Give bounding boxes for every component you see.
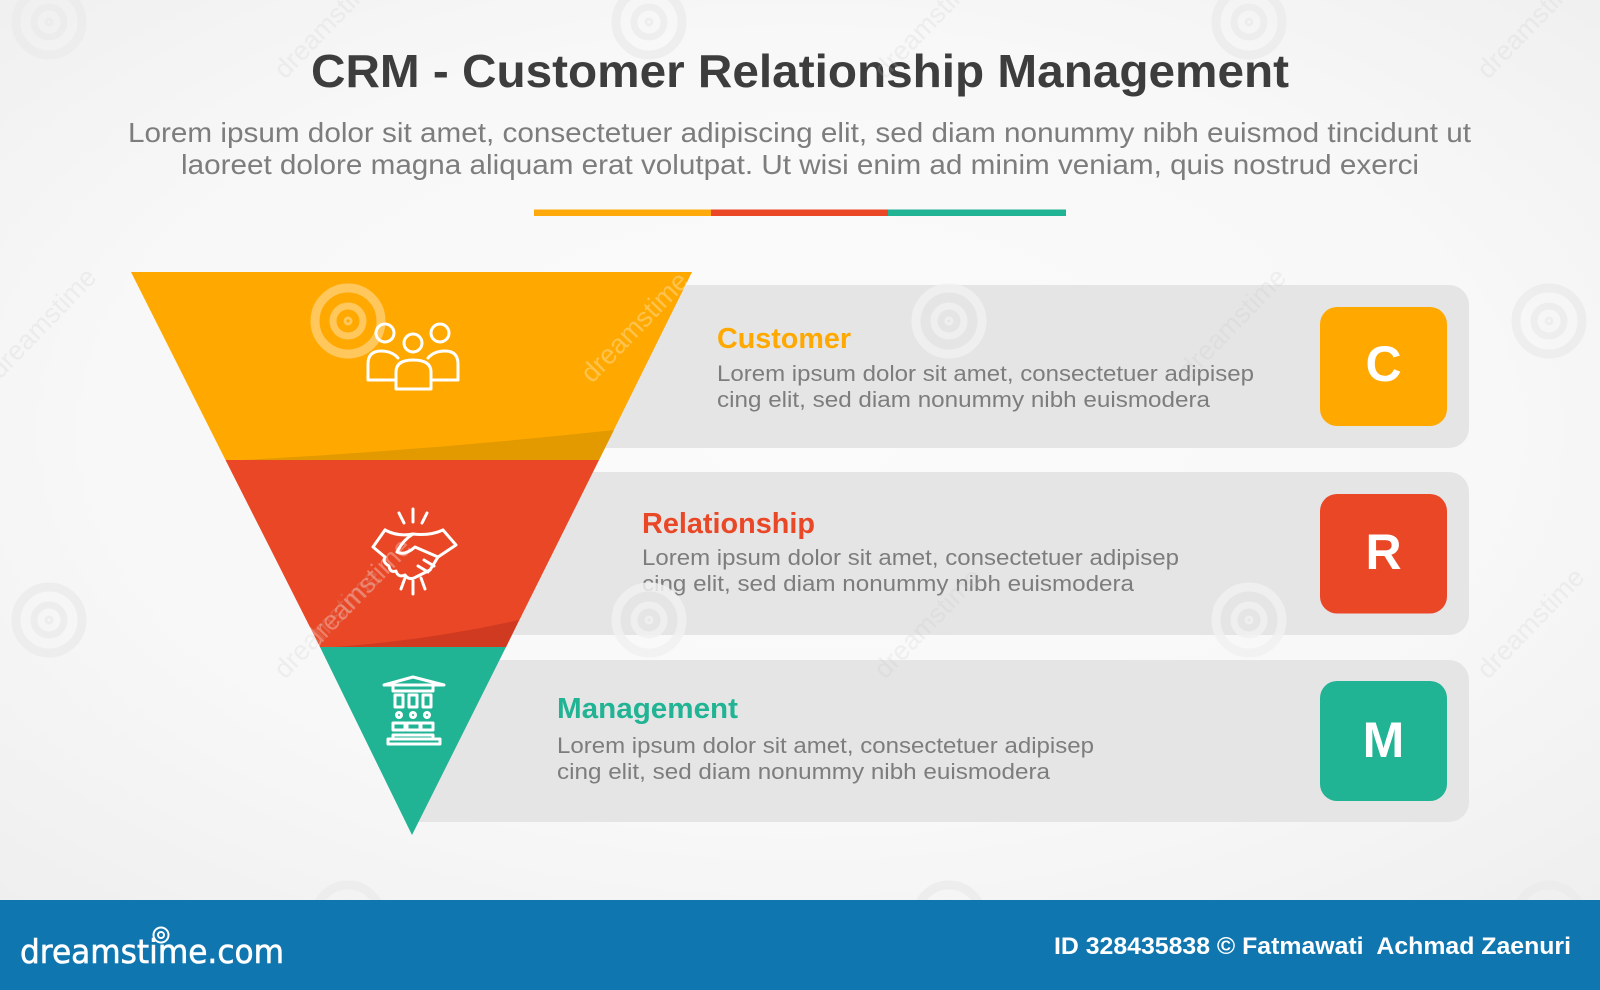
watermark text: dreamstime (575, 266, 694, 388)
letter tile M (1320, 681, 1447, 801)
letter tile C (1320, 307, 1447, 426)
text block: customer (717, 361, 1254, 412)
subtitle text (128, 117, 1471, 180)
text block: customer: Lorem ipsum dolor sit amet, consectetuer adipisep (717, 361, 1254, 386)
watermark text: dreamstime (868, 562, 987, 684)
watermark text: dreamstime (1173, 262, 1292, 384)
panel: customer (500, 285, 1469, 448)
pyramid band: management (320, 647, 506, 835)
heading: relationship: Relationship (642, 508, 815, 540)
icon: handshake (373, 509, 456, 594)
text block: relationship: Lorem ipsum dolor sit amet, consectetuer adipisep (642, 545, 1179, 570)
watermark text: dreamstime (298, 532, 417, 654)
watermark spiral on pyramid (315, 288, 381, 354)
footer bar (0, 900, 1600, 990)
heading: management: Management (557, 693, 738, 725)
pyramid band: customer (131, 272, 692, 460)
text block: management: Lorem ipsum dolor sit amet, consectetuer adipisep (557, 733, 1094, 758)
watermark text (0, 0, 1590, 684)
watermark text: dreamstime (1471, 562, 1590, 684)
letter tile R: R (1365, 524, 1402, 580)
text block: management (557, 733, 1094, 784)
text block: management: cing elit, sed diam nonummy nibh euismodera (557, 759, 1051, 784)
tricolor divider (534, 210, 1066, 216)
icon: institution (384, 677, 444, 744)
heading: customer: Customer (717, 323, 851, 355)
letter tile R (1320, 494, 1447, 614)
watermark spirals over panels (616, 288, 1282, 653)
letter tile C: C (1365, 336, 1402, 392)
text block: customer: cing elit, sed diam nonummy nibh euismodera (717, 387, 1211, 412)
title: CRM - Customer Relationship Management (311, 45, 1289, 97)
watermark text: dreamstime (268, 562, 387, 684)
footer credit: ID 328435838 © Fatmawati Achmad Zaenuri (1054, 933, 1571, 960)
subtitle text: Lorem ipsum dolor sit amet, consectetuer adipiscing elit, sed diam nonummy nibh euismod tincidunt ut (128, 117, 1471, 148)
icon: people (368, 324, 458, 389)
inverted pyramid (131, 272, 692, 835)
panel: relationship (420, 472, 1469, 635)
pyramid band: relationship (226, 460, 599, 647)
subtitle text: laoreet dolore magna aliquam erat volutpat. Ut wisi enim ad minim veniam, quis nostrud exerci (181, 149, 1419, 180)
panel: management (412, 660, 1469, 822)
text block: relationship (642, 545, 1179, 596)
letter tile M: M (1363, 712, 1404, 768)
text block: relationship: cing elit, sed diam nonummy nibh euismodera (642, 571, 1135, 596)
footer logo: dreamstime.com (20, 932, 284, 971)
